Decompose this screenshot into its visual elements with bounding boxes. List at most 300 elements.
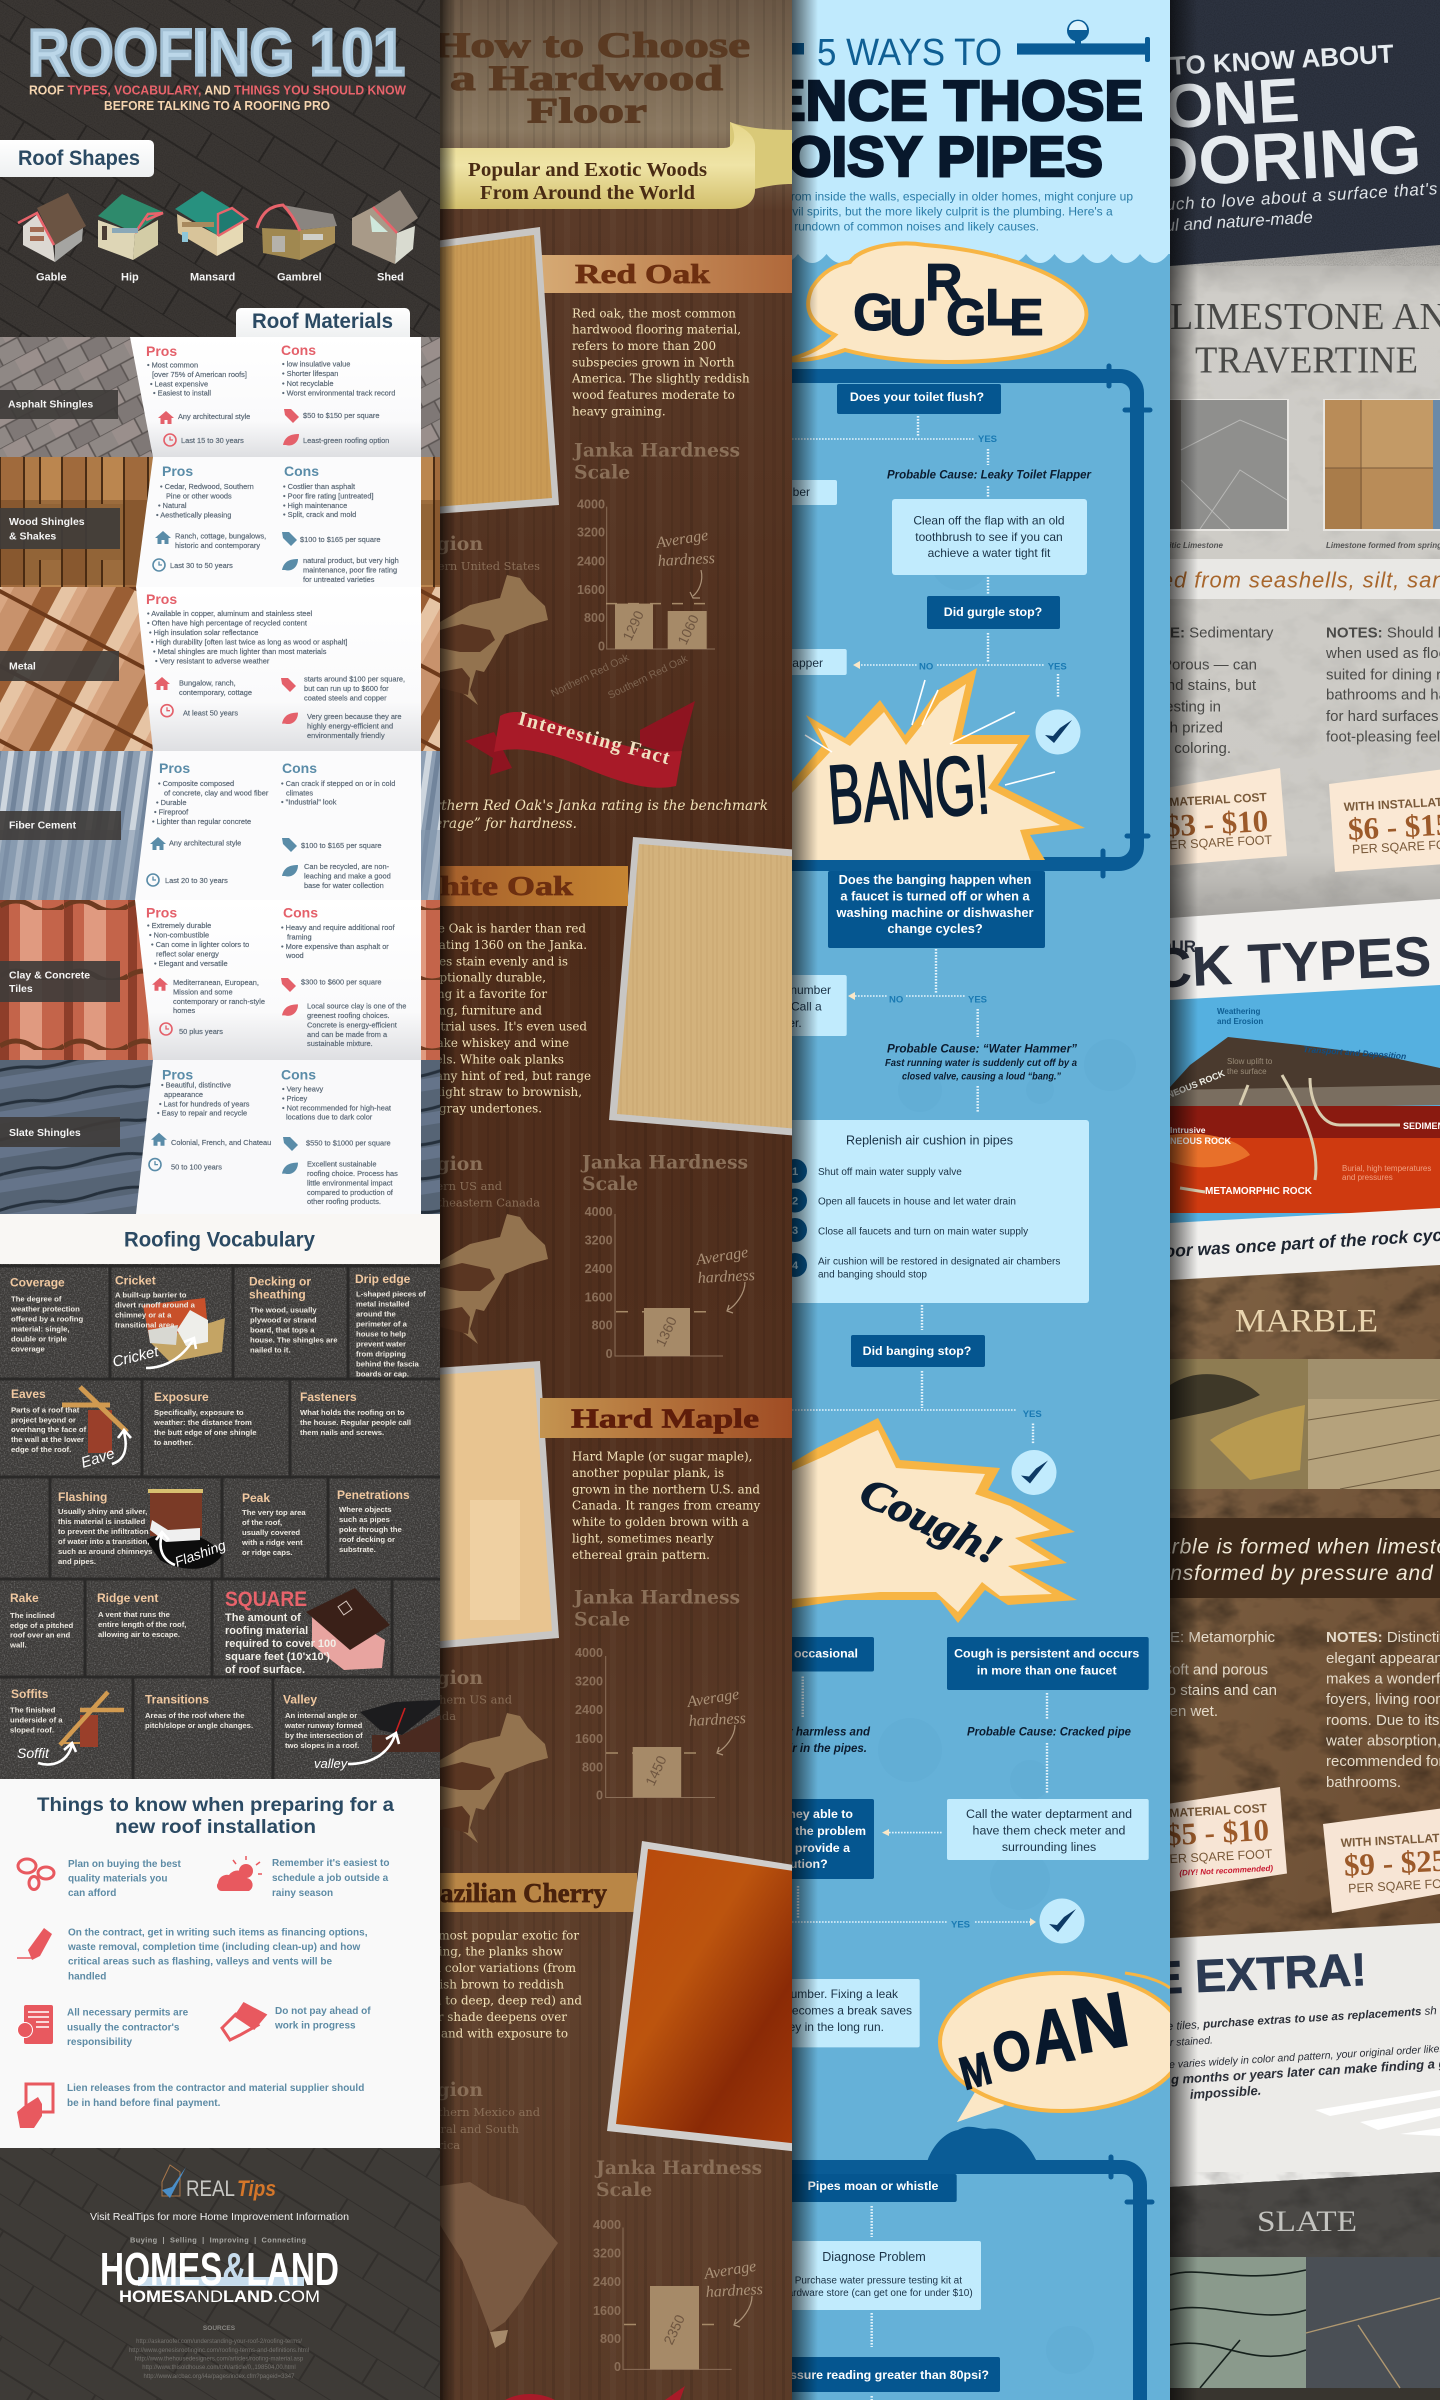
photo: slate shingles: [0, 1060, 440, 1215]
text: clay pros and cons: contemporary or ranch-style: [173, 997, 265, 1006]
chart: brazilian cherry Janka: Scale: [596, 2179, 652, 2201]
sources: [129, 2325, 309, 2380]
photo: brazilian cherry: [607, 1841, 800, 2152]
box: call a plumber second: [756, 975, 847, 1036]
box: call the water department: Call the water deptarment and: [966, 1807, 1132, 1821]
text: white oak: exceptionally durable,: [412, 971, 546, 985]
term: Drip edge: [355, 1272, 426, 1379]
text: water hammer: closed valve, causing a loud “bang.”: [902, 1072, 1061, 1083]
term: Cricket: A built-up barrier to: [115, 1291, 187, 1300]
text: wood pros and cons: • Poor fire rating [untreated]: [283, 491, 374, 500]
text: wood pros and cons: natural product, but very high: [303, 556, 399, 565]
card: marble material cost: $5 - $10: [1165, 1812, 1270, 1852]
text: marble type: slippery when wet.: [1095, 1703, 1218, 1720]
text: clay pros and cons: • Can come in lighter colors to: [151, 940, 249, 949]
box: replenish air cushion: Open all faucets in house and let water drain: [818, 1197, 1016, 1208]
box: replenish air cushion: Shut off main water supply valve: [818, 1167, 962, 1178]
text: metal pros and cons: • Very resistant to adverse weather: [155, 656, 270, 665]
text: wood pros and cons: Cons: [284, 463, 319, 479]
region: brazilian cherry: Southern Mexico and: [416, 2105, 540, 2119]
term: Soffits: sloped roof.: [10, 1725, 54, 1734]
text: clay pros and cons: • Elegant and versatile: [154, 959, 228, 968]
box: did banging stop: Did banging stop?: [863, 1344, 971, 1358]
diagram: rock cycle: Transport and Deposition: [1303, 1044, 1407, 1061]
tip: lien releases: Lien releases from the contractor and material supplier should: [67, 2083, 364, 2094]
text: slate pros and cons: Excellent sustainable: [307, 1160, 376, 1169]
photo: limestone: [1170, 399, 1289, 531]
text: white oak: with gray undertones.: [409, 1102, 542, 1116]
term: Drip edge: L-shaped pieces of: [356, 1290, 426, 1299]
term: Exposure: [153, 1390, 257, 1447]
text: slate pros and cons: little environmental impact: [307, 1179, 392, 1188]
diagram: rock cycle: the surface: [1227, 1067, 1267, 1076]
chart: hard maple Janka: 2400: [575, 1703, 603, 1717]
band: buy extra: e varies widely in color and pattern, your original order likely: [1169, 2043, 1440, 2071]
text: clay pros and cons: wood: [285, 951, 304, 960]
photo: fiber cement: [0, 751, 440, 901]
ribbon: subtitle: [420, 122, 792, 209]
region: brazilian cherry: Region: [409, 2079, 483, 2101]
label: Slate Shingles: Slate Shingles: [9, 1127, 81, 1139]
text: hard maple: [572, 1450, 760, 1562]
term: Rake: [9, 1591, 74, 1649]
text: fiber cement pros and cons: $100 to $165 per square: [301, 841, 382, 850]
term: Fasteners: the house. Regular people call: [300, 1418, 411, 1427]
background with wave: [770, 0, 1170, 2400]
icon: cloud and sun: [217, 1856, 262, 1891]
text: marble type: [1095, 1629, 1277, 1720]
term: Flashing: of water into a transition,: [58, 1537, 149, 1546]
logo: RealTips: Tips: [237, 2176, 276, 2201]
text: slate pros and cons: $550 to $1000 per square: [306, 1139, 391, 1148]
text: cracked pipe: Probable Cause: Cracked pipe: [967, 1727, 1132, 1739]
text: clay pros and cons: $300 to $600 per square: [301, 978, 382, 987]
label: Metal: [0, 651, 119, 681]
term: Peak: [241, 1491, 306, 1557]
heading: Roof Shapes: Roof Shapes: [18, 147, 140, 170]
photo: travertine: [1323, 399, 1440, 531]
term: Coverage: material: single,: [11, 1324, 70, 1333]
icon: shed house: [352, 190, 418, 264]
box: clean off the flap: Clean off the flap with an old: [913, 514, 1065, 528]
text: slate pros and cons: • Pricey: [282, 1094, 307, 1103]
term: Flashing: to prevent the infiltration: [58, 1527, 149, 1536]
term: Decking or sheathing: board, that tops a: [250, 1326, 315, 1334]
term: Drip edge: Drip edge: [355, 1272, 411, 1286]
box: cough persistent: [947, 1637, 1149, 1690]
term: Exposure: Exposure: [154, 1390, 209, 1404]
header: stone flooring: [1056, 0, 1440, 266]
text: metal pros and cons: At least 50 years: [183, 708, 238, 718]
term: Ridge vent: [97, 1591, 186, 1639]
box: replenish air cushion: 4: [792, 1260, 799, 1272]
text: wood pros and cons: Pine or other woods: [166, 491, 232, 500]
burst: bang: [785, 668, 1085, 860]
illustration: valley: [314, 1700, 440, 1771]
burst: cough: Cough!: [853, 1469, 1008, 1574]
text: asphalt pros and cons: • low insulative value: [282, 360, 350, 369]
band: marble is formed: [1120, 1518, 1440, 1598]
text: limestone type: h prized: [1170, 719, 1223, 736]
text: asphalt pros and cons: • Least expensive: [150, 380, 208, 388]
text: clay pros and cons: sustainable mixture.: [307, 1039, 373, 1048]
text: white oak: White Oak is harder than red: [409, 922, 586, 936]
term: Decking or sheathing: The wood, usually: [250, 1306, 317, 1314]
chart: red oak Janka: 0: [598, 640, 605, 654]
text: red oak: America. The slightly reddish: [571, 372, 750, 386]
text: clay pros and cons: • Non-combustible: [149, 931, 209, 940]
term: Valley: water runway formed: [284, 1721, 363, 1730]
speech bubble: gurgle: [785, 244, 1086, 362]
diagram: rock cycle: METAMORPHIC ROCK: [1205, 1186, 1313, 1197]
chart: white oak Janka: 3200: [585, 1233, 613, 1247]
flow: toilet yes: YES: [978, 434, 997, 445]
header: stone flooring: FLOORING: [1061, 111, 1423, 207]
chart: red oak Janka: Scale: [574, 462, 630, 484]
heading: Roofing Vocabulary: [0, 1214, 440, 1265]
tip: rainy season: rainy season: [272, 1888, 333, 1899]
roof shape labels: Hip: [121, 272, 139, 284]
panel: things to know: [0, 1779, 440, 2149]
text: harmless air: [743, 1676, 871, 1755]
term: Coverage: The degree of: [11, 1294, 62, 1303]
chart: white oak Janka: 0: [606, 1347, 613, 1361]
chart: red oak Janka: Janka Hardness: [572, 440, 740, 462]
text: fiber cement pros and cons: Can be recycled, are non-: [304, 862, 390, 871]
term: Decking or sheathing: nailed to it.: [250, 1346, 291, 1354]
text: brazilian cherry: their shade deepens over: [414, 2010, 567, 2024]
text: brazilian cherry: brown to deep, deep red) and: [403, 1994, 582, 2008]
box: call a plumber fix leak: money in the long run.: [765, 2020, 884, 2034]
text: metal pros and cons: Pros: [146, 591, 177, 607]
photo: metal roof: [0, 587, 440, 752]
term: Square: [225, 1588, 336, 1676]
text: asphalt pros and cons: • Shorter lifespan: [282, 369, 338, 378]
illustration: flashing: [146, 1489, 228, 1570]
text: wood pros and cons: • Split, crack and mold: [283, 510, 356, 519]
band: Brazilian Cherry: [410, 1873, 637, 1912]
photo: slate rock: [1170, 2257, 1306, 2388]
ribbon: subtitle: From Around the World: [480, 182, 695, 204]
text: slate pros and cons: • Last for hundreds of years: [159, 1100, 250, 1108]
title: Floor: [527, 90, 647, 130]
term: Flashing: [58, 1490, 152, 1566]
illustration: valley: valley: [314, 1756, 349, 1771]
ribbon peek at bottom: [505, 2386, 685, 2400]
term: Fasteners: Fasteners: [300, 1390, 357, 1404]
photo captions: Oolitic Limestone: [1156, 541, 1224, 550]
term: Peak: with a ridge vent: [241, 1538, 303, 1547]
box: replenish air cushion: 3: [792, 1225, 798, 1237]
text: wood pros and cons: Pros: [162, 463, 193, 479]
term: Drip edge: metal installed: [356, 1300, 410, 1309]
term: Decking or sheathing: house. The shingles are: [250, 1336, 338, 1344]
box: banging question: washing machine or dishwasher: [836, 905, 1034, 920]
water blotches: [878, 530, 1136, 2374]
text: wood pros and cons: Ranch, cottage, bungalows,: [175, 532, 266, 540]
card: limestone material cost: $3 - $10: [1164, 803, 1269, 843]
band: Hard Maple: Hard Maple: [571, 1404, 759, 1434]
header: stone flooring: THINGS TO KNOW ABOUT: [1064, 38, 1395, 87]
term: Soffits: The finished: [10, 1705, 56, 1714]
box: banging question: change cycles?: [887, 921, 983, 936]
card: limestone material cost: [1158, 768, 1287, 866]
chart: brazilian cherry Janka: Janka Hardness: [594, 2157, 762, 2179]
icon: check gurgle: [1036, 710, 1080, 754]
term: Soffits: Soffits: [11, 1687, 49, 1701]
text: intro: rundown of common noises and likely causes.: [794, 220, 1039, 234]
box: replace flapper: Replace the flapper: [719, 656, 823, 670]
text: hard maple: ethereal grain pattern.: [572, 1548, 710, 1562]
roof shape labels: Gambrel: [277, 272, 322, 284]
term: Penetrations: Penetrations: [337, 1488, 410, 1502]
text: marble notes: rooms. Due to its: [1326, 1712, 1439, 1729]
illustration: flashing: Flashing: [173, 1537, 228, 1570]
text: slate pros and cons: [149, 1067, 398, 1206]
band: Red Oak: Red Oak: [575, 259, 710, 289]
text: intro: evil spirits, but the more likely culprit is the plumbing. Here's a: [786, 204, 1113, 218]
text: slate pros and cons: appearance: [164, 1090, 203, 1099]
term: Decking or sheathing: [249, 1274, 338, 1354]
term: Ridge vent: Ridge vent: [97, 1591, 158, 1605]
term: Valley: [283, 1692, 363, 1750]
header: stone flooring: STONE: [1085, 66, 1301, 147]
text: asphalt pros and cons: [over 75% of American roofs]: [152, 370, 247, 379]
text: fiber cement pros and cons: • Can crack if stepped on or in cold: [281, 779, 395, 788]
header: stone flooring: uch to love about a surface that's: [1165, 179, 1438, 214]
stone background: [1170, 240, 1440, 920]
box: pipes moan or whistle: [780, 2174, 957, 2237]
label: Wood Shingles: Wood Shingles: [9, 516, 85, 528]
roof shape labels: Gable: [36, 272, 67, 284]
subtitle: [30, 86, 406, 110]
term: Cricket: [111, 1274, 196, 1371]
tip: best quality: Plan on buying the best: [68, 1859, 181, 1870]
box: cough occasional: [738, 1637, 874, 1672]
band: formed from seashells: [1106, 559, 1440, 599]
text: clay pros and cons: • Extremely durable: [147, 921, 211, 930]
term: Ridge vent: allowing air to escape.: [98, 1630, 180, 1639]
text: marble type: Soft and porous: [1162, 1662, 1268, 1678]
chart: brazilian cherry Janka: [593, 2157, 763, 2374]
text: intro: Noises from inside the walls, especially in older homes, might conjure up: [747, 190, 1133, 204]
shadow from hardwood column: [792, 0, 818, 2400]
term: Eaves: Eaves: [11, 1387, 46, 1401]
text: asphalt pros and cons: • Not recyclable: [282, 379, 333, 388]
text: red oak: hardwood flooring material,: [572, 323, 741, 337]
heading: limestone and travertine: TRAVERTINE: [1195, 340, 1418, 382]
label: Clay and Concrete Tiles: Tiles: [9, 983, 33, 995]
box: call a plumber second: Call a: [791, 1000, 822, 1014]
illustration: square house: [306, 1588, 390, 1670]
card: marble material cost: [1158, 1787, 1287, 1893]
box: diagnose problem: [780, 2241, 981, 2347]
heading: things to know: Things to know when preparing for a: [37, 1794, 394, 1816]
term: Valley: Valley: [283, 1692, 317, 1706]
chart: red oak Janka: hardness: [657, 550, 715, 570]
icon: check banging: [1012, 1450, 1056, 1495]
diagram: rock cycle: and pressures: [1342, 1173, 1393, 1182]
icon: gambrel house: [257, 205, 337, 260]
chart: red oak Janka: 4000: [577, 498, 605, 512]
icon: hand with tablet: [17, 2084, 53, 2128]
term: Eaves: project beyond or: [11, 1415, 76, 1424]
box: diagnose problem: hardware store (can get one for under $10): [782, 2288, 973, 2299]
text: marble notes: bathrooms.: [1326, 1774, 1401, 1791]
text: metal pros and cons: coated steels and copper: [304, 693, 387, 702]
flow: gurgle stop: YES: [1048, 661, 1067, 672]
speech bubble: gurgle: GURGLE: [853, 254, 1044, 347]
chart: white oak Janka: 2400: [585, 1262, 613, 1276]
text: wood pros and cons: [153, 463, 399, 584]
tip: rainy season: [272, 1858, 389, 1899]
flow: gurgle stop: NO: [919, 661, 933, 672]
shadow from roofing column: [440, 0, 456, 2400]
box: pressure reading: Is pressure reading greater than 80psi?: [757, 2368, 989, 2382]
tip: best quality: can afford: [68, 1888, 116, 1899]
chart: brazilian cherry Janka: Average: [702, 2258, 757, 2283]
panel: Roofing 101 column: [0, 0, 440, 2400]
term: Rake: wall.: [9, 1640, 27, 1649]
sources: http://www.arcbac.org/i4a/pages/index.cfm?pageid=3347: [144, 2374, 295, 2380]
box: are they able: locate the problem: [756, 1824, 866, 1838]
text: limestone type: Porous — can: [1162, 657, 1257, 674]
illustration: cricket: [143, 1298, 225, 1362]
text: limestone type: E: Sedimentary: [1170, 624, 1274, 642]
photo: wood shingles: [0, 457, 440, 587]
sources: http://www.thehousedesigners.com/articles/roofing-material.asp: [135, 2356, 304, 2362]
tip: permits: responsibility: [67, 2037, 132, 2048]
header: stone flooring: beautiful and nature-made: [1114, 208, 1313, 238]
term: Soffits: underside of a: [10, 1715, 63, 1724]
text: wood pros and cons: for untreated varieties: [303, 575, 375, 584]
text: clay pros and cons: homes: [173, 1006, 195, 1015]
text: wood pros and cons: $100 to $165 per square: [300, 535, 381, 544]
box: call the water department: surrounding lines: [1002, 1840, 1096, 1854]
text: hard maple: another popular plank, is: [572, 1466, 724, 1480]
box: replenish air cushion: Replenish air cushion in pipes: [846, 1133, 1013, 1147]
tip: rainy season: schedule a job outside a: [272, 1873, 389, 1884]
band: buy extra: BE EXTRA!: [1118, 1943, 1367, 2005]
term: Fasteners: What holds the roofing on to: [300, 1408, 405, 1417]
text: asphalt pros and cons: $50 to $150 per square: [303, 411, 379, 420]
title: a Hardwood: [450, 58, 723, 98]
text: fiber cement pros and cons: Pros: [159, 760, 190, 776]
chart: red oak Janka: 1060: [674, 612, 702, 647]
text: marble type: prone to stains and can: [1121, 1682, 1277, 1699]
text: limestone type: esting in: [1165, 699, 1221, 716]
title: silence those noisy pipes: [677, 69, 1143, 189]
term: Square: required to cover 100: [225, 1638, 336, 1650]
label: Fiber Cement: [0, 811, 121, 840]
term: Peak: of the roof,: [242, 1518, 282, 1527]
band: White Oak: White Oak: [404, 871, 573, 901]
text: fiber cement pros and cons: Any architectural style: [169, 838, 241, 848]
title: silence those noisy pipes: SILENCE THOSE: [677, 69, 1143, 133]
text: metal pros and cons: starts around $100 per square,: [304, 674, 405, 684]
chart: red oak Janka: 1600: [577, 583, 605, 597]
marble background: [1170, 1255, 1440, 1945]
term: Valley: two slopes in a roof.: [285, 1741, 359, 1750]
region: brazilian cherry: America: [411, 2138, 460, 2152]
text: metal pros and cons: but can run up to $600 for: [304, 684, 389, 693]
box: are they able: solution?: [772, 1857, 828, 1871]
text: fiber cement pros and cons: leaching and make a good: [304, 871, 391, 880]
band: buy extra: [1118, 1923, 1440, 2187]
label: Metal: Metal: [9, 661, 36, 673]
map: South America: [440, 2182, 558, 2348]
text: clay pros and cons: greenest roofing choices.: [307, 1011, 390, 1020]
heading: limestone and travertine: [1170, 296, 1440, 382]
term: Exposure: the butt edge of one shingle: [154, 1428, 257, 1437]
diagram: rock cycle: Weathering: [1217, 1007, 1261, 1016]
term: Peak: The very top area: [242, 1508, 306, 1517]
region: red oak: [409, 533, 540, 573]
icon: pipe with gauge: [1017, 20, 1150, 62]
title: ROOFING 101: [28, 15, 405, 89]
chart: white oak Janka: Scale: [582, 1173, 638, 1195]
term: Square: square feet (10'x10'): [225, 1651, 330, 1663]
text: red oak: wood features moderate to: [572, 388, 735, 402]
text: clay pros and cons: • Heavy and require additional roof: [281, 923, 395, 932]
term: Penetrations: roof decking or: [339, 1535, 395, 1544]
term: Drip edge: house to help: [356, 1330, 406, 1339]
slate background: [1170, 2172, 1440, 2400]
text: metal pros and cons: • High durability [often last twice as long as wood or asphalt]: [151, 637, 348, 646]
chart: brazilian cherry Janka: 800: [600, 2332, 621, 2346]
photo: clay tiles: [0, 900, 440, 1061]
term: Valley: by the intersection of: [285, 1731, 363, 1740]
term: Cricket: Cricket: [111, 1343, 161, 1371]
term: Transitions: Areas of the roof where the: [145, 1711, 245, 1720]
text: fiber cement pros and cons: Last 20 to 30 years: [165, 876, 228, 885]
term: Square: The amount of: [225, 1612, 301, 1624]
map: white oak region: [440, 1214, 548, 1344]
text: red oak: [571, 306, 750, 418]
text: slate pros and cons: locations due to dark color: [286, 1113, 373, 1122]
text: white oak: rating 1360 on the Janka.: [433, 938, 587, 952]
text: slate pros and cons: • Beautiful, distinctive: [161, 1080, 231, 1090]
text: wood pros and cons: maintenance, poor fire rating: [303, 566, 397, 574]
logo: RealTips: REAL: [186, 2176, 235, 2201]
term: Fasteners: [300, 1390, 411, 1437]
text: red oak: refers to more than 200: [572, 339, 716, 353]
term: Coverage: [10, 1276, 83, 1353]
text: fiber cement pros and cons: Cons: [282, 760, 317, 776]
diagram: rock cycle: and Erosion: [1217, 1017, 1263, 1026]
chart: brazilian cherry Janka: 1600: [593, 2304, 621, 2318]
heading: slate: SLATE: [1257, 2205, 1357, 2238]
text: white oak: barrels. White oak planks: [409, 1052, 564, 1066]
text: metal pros and cons: • Available in copper, aluminum and stainless steel: [147, 609, 312, 618]
term: Eaves: overhang the face of: [11, 1425, 87, 1434]
box: replenish air cushion: Air cushion will be restored in designated air chambers: [818, 1256, 1060, 1267]
text: intro: [747, 190, 1133, 234]
text: clay pros and cons: framing: [287, 933, 312, 942]
term: Cricket: divert runoff around a: [115, 1301, 196, 1310]
ribbon: Interesting Fact: Interesting Fact: [516, 708, 672, 769]
term: Peak: or ridge caps.: [242, 1548, 292, 1557]
term: Rake: The inclined: [10, 1611, 55, 1620]
text: interesting fact: Northern Red Oak's Janka rating is the benchmark: [413, 798, 768, 814]
text: water hammer: [885, 1044, 1078, 1112]
card: marble with installation: [1323, 1808, 1440, 1913]
text: slate pros and cons: Colonial, French, and Chateau: [171, 1138, 271, 1147]
term: Decking or sheathing: Decking or: [249, 1274, 311, 1288]
chart: red oak Janka: 1290: [619, 608, 647, 643]
illustration: soffit: [17, 1692, 124, 1764]
box: banging question: a faucet is turned off or when a: [840, 888, 1030, 904]
